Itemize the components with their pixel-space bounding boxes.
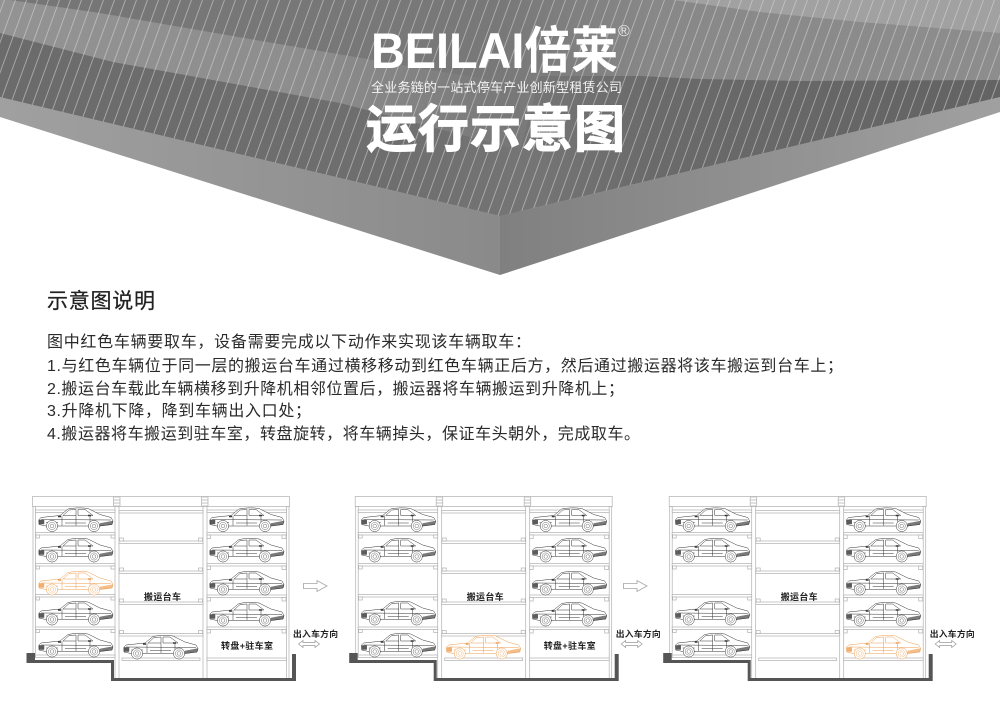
title: 运行示意图 bbox=[366, 101, 625, 158]
parked cars 2 bbox=[362, 508, 607, 657]
explanation text: 1.与红色车辆位于同一层的搬运台车通过横移移动到红色车辆正后方，然后通过搬运器将该车搬运到台车上； bbox=[47, 357, 843, 375]
registered mark: ® bbox=[618, 23, 630, 40]
parked cars 1 bbox=[39, 508, 284, 659]
explanation text bbox=[47, 333, 843, 443]
section heading: 示意图说明 bbox=[47, 290, 155, 313]
rack structure 1 bbox=[26, 496, 296, 681]
explanation text: 图中红色车辆要取车，设备需要完成以下动作来实现该车辆取车： bbox=[47, 333, 531, 351]
explanation text: 3.升降机下降，降到车辆出入口处； bbox=[47, 402, 311, 420]
orange car 2 bbox=[446, 635, 521, 659]
label: entry direction: 出入车方向 bbox=[930, 628, 975, 639]
banner left side face bbox=[0, 97, 500, 275]
arrow: step 2 to 3 bbox=[624, 580, 647, 592]
banner top face with bands bbox=[0, 0, 1000, 220]
parked cars 3 bbox=[676, 508, 921, 657]
label: carrier cart: 搬运台车 bbox=[781, 591, 818, 602]
label: entry direction: 出入车方向 bbox=[293, 628, 338, 639]
rack structure 2 bbox=[349, 496, 619, 681]
diagram 2 bbox=[349, 496, 661, 681]
diagram 3 bbox=[663, 496, 975, 681]
icon: double arrow bbox=[935, 640, 956, 648]
label: turntable room: 转盘+驻车室 bbox=[544, 640, 596, 651]
rack structure 3 bbox=[663, 496, 933, 681]
orange car 3 bbox=[846, 635, 921, 659]
label: turntable room: 转盘+驻车室 bbox=[221, 640, 273, 651]
label: entry direction: 出入车方向 bbox=[616, 628, 661, 639]
label: carrier cart: 搬运台车 bbox=[144, 591, 181, 602]
icon: double arrow bbox=[298, 640, 320, 648]
explanation text: 4.搬运器将车搬运到驻车室，转盘旋转，将车辆掉头，保证车头朝外，完成取车。 bbox=[47, 424, 640, 443]
orange car 1 bbox=[39, 571, 113, 595]
arrow: step 1 to 2 bbox=[304, 580, 327, 592]
label: carrier cart: 搬运台车 bbox=[467, 591, 504, 602]
icon: double arrow bbox=[621, 640, 642, 648]
diagram 1 bbox=[26, 496, 338, 681]
banner right side face bbox=[500, 97, 1000, 275]
explanation text: 2.搬运台车载此车辆横移到升降机相邻位置后，搬运器将车辆搬运到升降机上； bbox=[47, 380, 624, 398]
logo wordmark: BEILAI倍莱 bbox=[371, 23, 618, 79]
tagline: 全业务链的一站式停车产业创新型租赁公司 bbox=[371, 80, 622, 95]
header banner bbox=[0, 0, 1000, 275]
